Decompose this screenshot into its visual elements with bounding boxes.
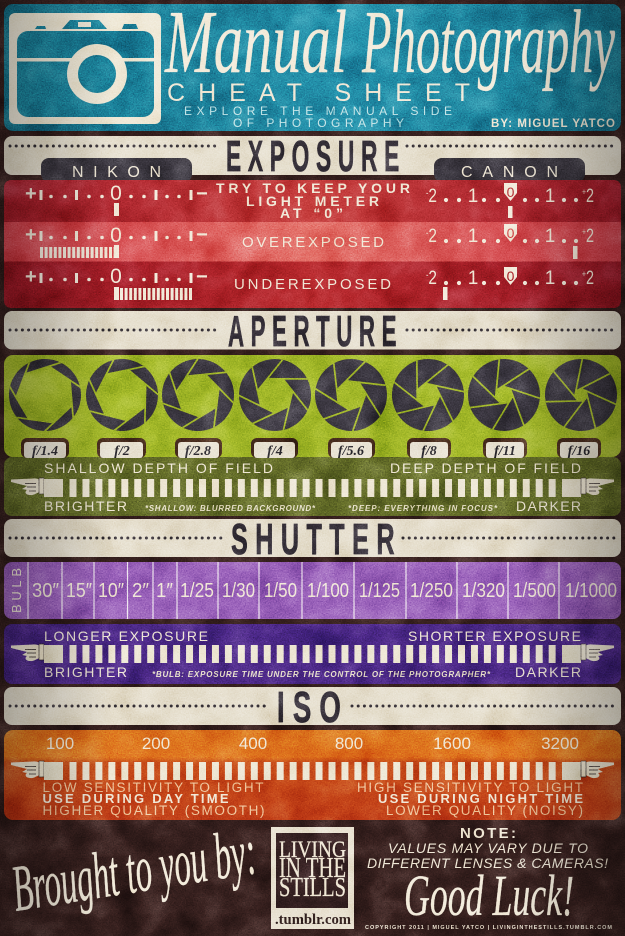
note: deep: *DEEP: EVERYTHING IN FOCUS*: [348, 504, 498, 513]
speed labels: 1/250: [410, 580, 453, 602]
iris f/1.4: [9, 359, 81, 431]
canon meter: +: [582, 187, 586, 197]
tab f/1.4: [21, 438, 69, 459]
nikon meter: [25, 182, 208, 216]
canon meter: [426, 183, 594, 218]
f-stop tabs: [21, 438, 601, 459]
shutter scale panel: [4, 624, 621, 684]
logo: living in the stills: IN THE: [279, 852, 346, 884]
note: NOTE:: [460, 825, 516, 842]
copyright: COPYRIGHT 2011 | MIGUEL YATCO | LIVINGINTHESTILLS.TUMBLR.COM: [365, 925, 612, 931]
tab: canon: [434, 158, 585, 182]
heading: iso: ISO: [277, 683, 349, 732]
iso values: 400: [239, 734, 267, 753]
tab f/11: f/11: [494, 444, 516, 459]
canon meter: +: [582, 269, 586, 279]
text: shallow depth of field: SHALLOW DEPTH OF FIELD: [44, 460, 273, 476]
speed labels: 1/100: [307, 580, 349, 602]
tab f/8: [407, 438, 451, 459]
icon: right pointing hand: [581, 478, 614, 495]
instruction text: AT “0”: [280, 205, 343, 221]
tagline: [184, 104, 452, 130]
text: brighter: BRIGHTER: [44, 664, 127, 680]
nikon meter: +: [25, 266, 37, 288]
row: underexposed: [4, 262, 621, 308]
canon meter: 1: [468, 268, 478, 289]
iris f/5.6: [315, 359, 387, 431]
canon meter: 2: [428, 268, 437, 289]
note: DIFFERENT LENSES & CAMERAS!: [367, 855, 608, 871]
nikon meter: 0: [110, 182, 122, 205]
tagline: EXPLORE THE MANUAL SIDE: [184, 104, 452, 118]
icon: camera: [9, 13, 161, 124]
tagline: OF PHOTOGRAPHY: [233, 116, 404, 130]
speed labels: 1/50: [264, 580, 297, 602]
tab: nikon: NIKON: [72, 164, 161, 181]
logo: living in the stills: .tumblr.com: [275, 912, 351, 928]
text: high iso: LOWER QUALITY (NOISY): [386, 803, 583, 818]
iso heading bar: [4, 683, 621, 732]
heading: exposure: EXPOSURE: [226, 132, 406, 181]
tab f/8: f/8: [421, 444, 437, 459]
note: bulb: *BULB: EXPOSURE TIME UNDER THE CONTROL OF THE PHOTOGRAPHER*: [152, 670, 491, 679]
canon meter: -: [426, 270, 428, 280]
speed labels: [32, 580, 617, 602]
label: UNDEREXPOSED: [234, 276, 391, 293]
heading: aperture: APERTURE: [228, 307, 403, 356]
iso values: 3200: [541, 734, 579, 753]
label: OVEREXPOSED: [242, 234, 384, 251]
text: longer exposure: LONGER EXPOSURE: [44, 628, 208, 644]
stop scale: [44, 479, 581, 497]
tab f/2.8: f/2.8: [185, 444, 211, 459]
canon meter: [426, 224, 594, 259]
instruction text: [216, 180, 410, 221]
stop scale: [44, 762, 581, 780]
iso values: [46, 734, 579, 753]
shutter heading bar: [4, 515, 621, 564]
tab: canon: CANON: [461, 164, 558, 181]
icon: left pointing hand: [11, 644, 44, 661]
nikon meter: +: [25, 183, 37, 205]
text: darker: DARKER: [516, 498, 581, 514]
canon meter: 1: [468, 186, 478, 207]
iris f/2: [86, 359, 158, 431]
icon: left pointing hand: [11, 478, 44, 495]
iso values: 100: [46, 734, 74, 753]
canon meter: [426, 267, 594, 300]
text: high iso: USE DURING NIGHT TIME: [378, 791, 583, 806]
speed labels: 15″: [66, 580, 92, 602]
depth of field panel: [4, 457, 621, 516]
aperture panel: [4, 355, 621, 457]
canon meter: +: [582, 227, 586, 237]
iris f/2.8: [162, 359, 234, 431]
canon meter: 1: [545, 268, 555, 289]
speed labels: 1/25: [180, 580, 214, 602]
nikon meter: 0: [110, 265, 122, 288]
iso values: 800: [335, 734, 363, 753]
text: shorter exposure: SHORTER EXPOSURE: [408, 628, 581, 644]
tab f/2: f/2: [114, 444, 130, 459]
nikon meter: 0: [110, 224, 122, 247]
text: brighter: BRIGHTER: [44, 498, 127, 514]
aperture heading bar: [4, 307, 621, 356]
subtitle: cheat sheet: CHEAT SHEET: [167, 79, 470, 107]
nikon meter: −: [196, 224, 208, 246]
speed labels: 1/125: [359, 580, 400, 602]
speed labels: 1/1000: [565, 580, 617, 602]
speed labels: 30″: [32, 580, 59, 602]
canon meter: 2: [428, 226, 437, 247]
tab f/1.4: f/1.4: [32, 444, 58, 459]
canon meter: -: [426, 188, 428, 198]
label: bulb: BULB: [9, 568, 24, 613]
icon: right pointing hand: [581, 761, 614, 778]
iris f/16: [545, 359, 617, 431]
nikon meter: −: [196, 183, 208, 205]
logo: living in the stills: STILLS: [279, 872, 346, 902]
tab f/16: f/16: [568, 444, 590, 459]
speed labels: 1″: [156, 580, 173, 602]
tab f/2: [97, 438, 146, 459]
speed labels: 10″: [98, 580, 124, 602]
canon meter: 2: [586, 268, 594, 289]
iso values: 200: [142, 734, 170, 753]
shutter speeds panel: [4, 562, 621, 619]
tab f/11: [483, 438, 527, 459]
tab f/4: f/4: [267, 444, 283, 459]
canon meter: 1: [545, 186, 555, 207]
iris f/11: [468, 359, 540, 431]
stop scale: [44, 645, 581, 663]
canon meter: 1: [468, 226, 478, 247]
text: high iso: HIGH SENSITIVITY TO LIGHT: [357, 780, 583, 795]
row: correct exposure: [4, 180, 621, 222]
speed labels: 1/30: [222, 580, 255, 602]
canon meter: 2: [586, 186, 594, 207]
iris f/8: [392, 359, 464, 431]
note: [367, 825, 608, 871]
iso panel: [4, 730, 621, 820]
logo: living in the stills: [271, 827, 354, 929]
note: VALUES MAY VARY DUE TO: [388, 840, 588, 856]
tab f/4: [251, 438, 298, 459]
speed labels: 1/500: [513, 580, 556, 602]
text: low iso: USE DURING DAY TIME: [42, 791, 229, 806]
footer script: brought to you by: Brought to you by:: [7, 815, 261, 926]
exposure heading bar: [4, 132, 621, 181]
tab f/5.6: f/5.6: [338, 444, 364, 459]
instruction text: LIGHT METER: [246, 193, 379, 209]
nikon meter: −: [196, 266, 208, 288]
canon meter: -: [426, 228, 428, 238]
tab f/5.6: [328, 438, 375, 459]
canon meter: 0: [507, 225, 515, 241]
tab: nikon: [41, 158, 192, 182]
row: overexposed: [4, 222, 621, 262]
iso values: 1600: [433, 734, 471, 753]
canon meter: 0: [507, 184, 515, 200]
exposure panel: [4, 180, 621, 308]
speed labels: 2″: [132, 580, 149, 602]
text: low iso: HIGHER QUALITY (SMOOTH): [42, 803, 264, 818]
speed labels: 1/320: [462, 580, 505, 602]
title: [164, 0, 615, 92]
instruction text: TRY TO KEEP YOUR: [216, 180, 410, 196]
byline: BY: MIGUEL YATCO: [491, 118, 615, 130]
nikon meter: [25, 224, 208, 258]
text: darker: DARKER: [515, 664, 581, 680]
text: deep depth of field: DEEP DEPTH OF FIELD: [390, 460, 581, 476]
canon meter: 1: [545, 226, 555, 247]
nikon meter: +: [25, 224, 37, 246]
canon meter: 2: [586, 226, 594, 247]
tab f/2.8: [175, 438, 222, 459]
canon meter: 2: [428, 186, 437, 207]
canon meter: 0: [507, 268, 515, 284]
note: shallow: *SHALLOW: BLURRED BACKGROUND*: [145, 504, 316, 513]
iris f/4: [239, 359, 311, 431]
tab f/16: [557, 438, 601, 459]
text: low iso: LOW SENSITIVITY TO LIGHT: [42, 780, 264, 795]
text: low iso: [42, 780, 264, 818]
nikon meter: [25, 265, 208, 300]
icon: left pointing hand: [11, 761, 44, 778]
header panel: title and camera: [4, 0, 621, 131]
icon: right pointing hand: [581, 644, 614, 661]
logo: living in the stills: LIVING: [279, 837, 346, 862]
heading: shutter: SHUTTER: [231, 515, 402, 564]
text: high iso: [357, 780, 583, 818]
